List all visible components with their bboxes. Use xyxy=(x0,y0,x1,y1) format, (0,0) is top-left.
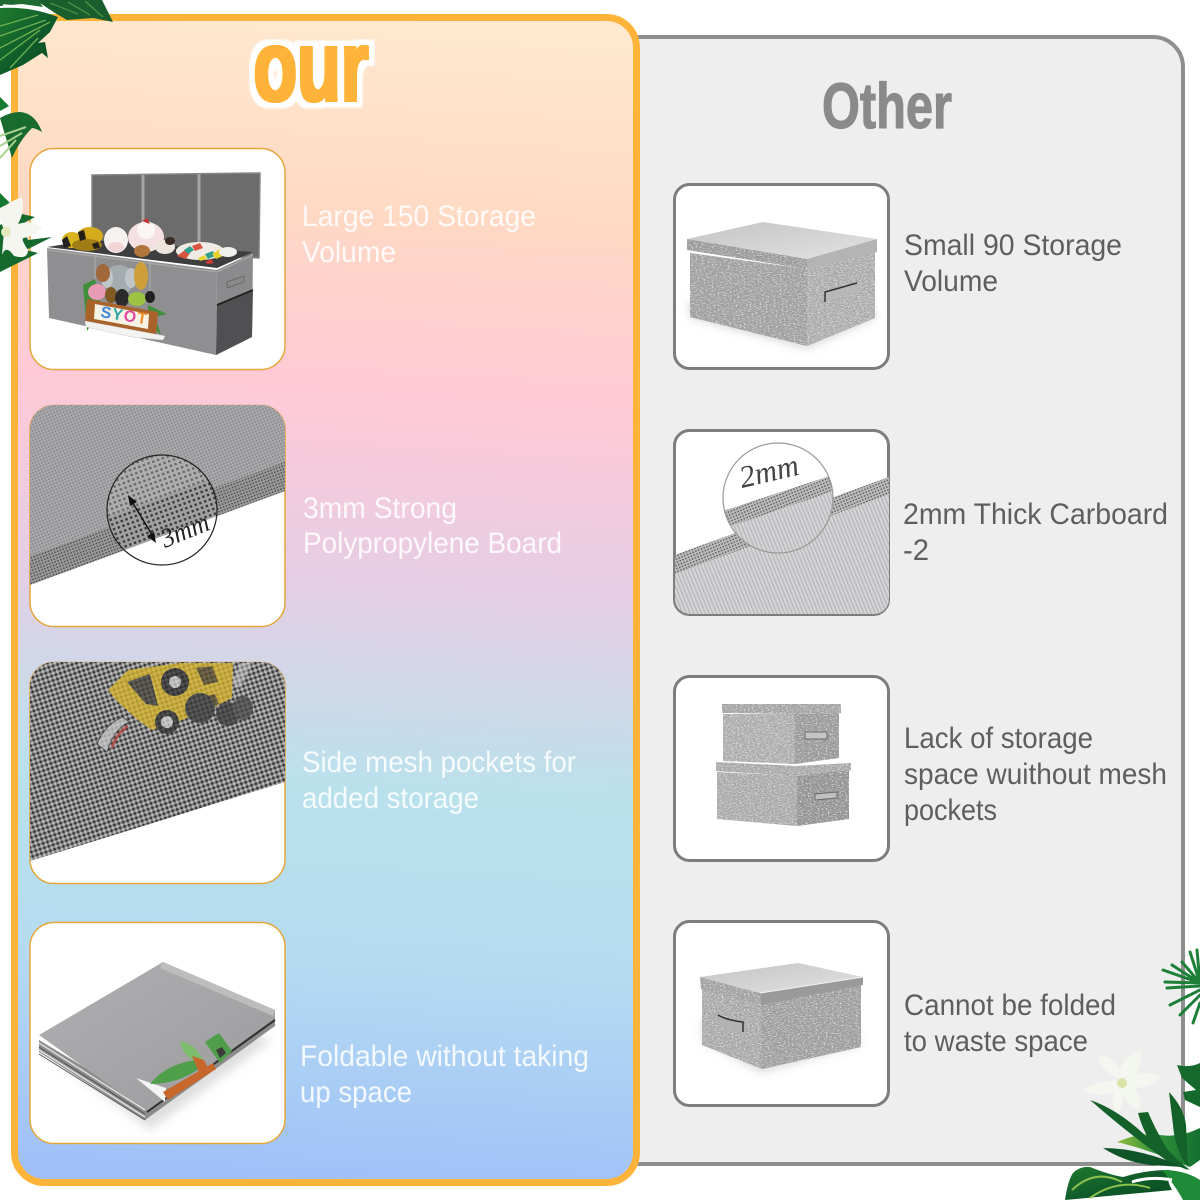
card: 2mm cardboard xyxy=(674,430,889,614)
text: cannot fold: Cannot be folded xyxy=(904,989,1116,1022)
text: cannot fold xyxy=(904,989,1116,1058)
icon: stacked linen boxes xyxy=(716,704,851,826)
icon: box interior rim xyxy=(47,240,253,268)
icon: bottom right leaves xyxy=(1065,1063,1200,1200)
text: small storage: Volume xyxy=(904,265,998,298)
text: large storage: Volume xyxy=(302,236,396,269)
text: small storage xyxy=(904,229,1122,298)
icon: open box lid xyxy=(92,173,260,258)
card: folded box xyxy=(30,922,285,1144)
icon: zoo animal sign xyxy=(83,262,167,340)
icon: palm frond bottom right xyxy=(1163,950,1200,1023)
text: foldable: Foldable without taking xyxy=(300,1040,589,1073)
icon: magnifier circle xyxy=(720,443,836,560)
card: large toy box xyxy=(30,148,285,370)
icon: linen box xyxy=(687,222,877,348)
text: small storage: Small 90 Storage xyxy=(904,229,1122,262)
icon: white flower top left xyxy=(0,197,42,257)
card: stacked boxes xyxy=(674,676,888,860)
text: mesh pockets: added storage xyxy=(302,782,479,815)
text: mesh pockets xyxy=(302,746,576,815)
icon: plush toys xyxy=(62,218,237,264)
icon: zoo animal sign: SYOT xyxy=(99,304,148,328)
text: large storage xyxy=(302,200,536,269)
text: 2mm cardboard: -2 xyxy=(903,534,929,567)
icon: toy excavator xyxy=(97,663,253,752)
text: strong board: 3mm Strong xyxy=(303,492,457,525)
text: foldable: up space xyxy=(300,1076,412,1109)
card: side mesh pocket xyxy=(30,662,285,884)
text: 2mm cardboard xyxy=(903,498,1168,567)
text: mesh pockets: Side mesh pockets for xyxy=(302,746,576,779)
text: strong board: Polypropylene Board xyxy=(303,527,562,560)
text: large storage: Large 150 Storage xyxy=(302,200,536,233)
heading: Other: Other xyxy=(822,70,952,142)
text: lack of mesh: space wuithout mesh xyxy=(904,758,1167,791)
icon: magnifier circle: 2mm xyxy=(736,447,802,495)
heading: our: our xyxy=(254,10,368,122)
text: lack of mesh xyxy=(904,722,1167,827)
icon: magnifier circle xyxy=(106,454,218,566)
text: strong board xyxy=(303,492,562,560)
icon: folded board xyxy=(39,962,275,1120)
card: 3mm board xyxy=(30,405,285,626)
icon: box body xyxy=(47,248,217,355)
icon: magnifier circle: 3mm xyxy=(155,507,214,554)
text: foldable xyxy=(300,1040,589,1109)
text: 2mm cardboard: 2mm Thick Carboard xyxy=(903,498,1168,531)
text: lack of mesh: pockets xyxy=(904,794,997,827)
icon: white flower bottom right xyxy=(1083,1050,1160,1115)
card: small box xyxy=(674,184,888,368)
text: lack of mesh: Lack of storage xyxy=(904,722,1093,755)
text: cannot fold: to waste space xyxy=(904,1025,1088,1058)
card: rigid box xyxy=(674,922,888,1106)
icon: linen box xyxy=(700,963,863,1072)
icon: top left leaves xyxy=(0,0,113,272)
icon: printed plants xyxy=(136,1033,232,1102)
